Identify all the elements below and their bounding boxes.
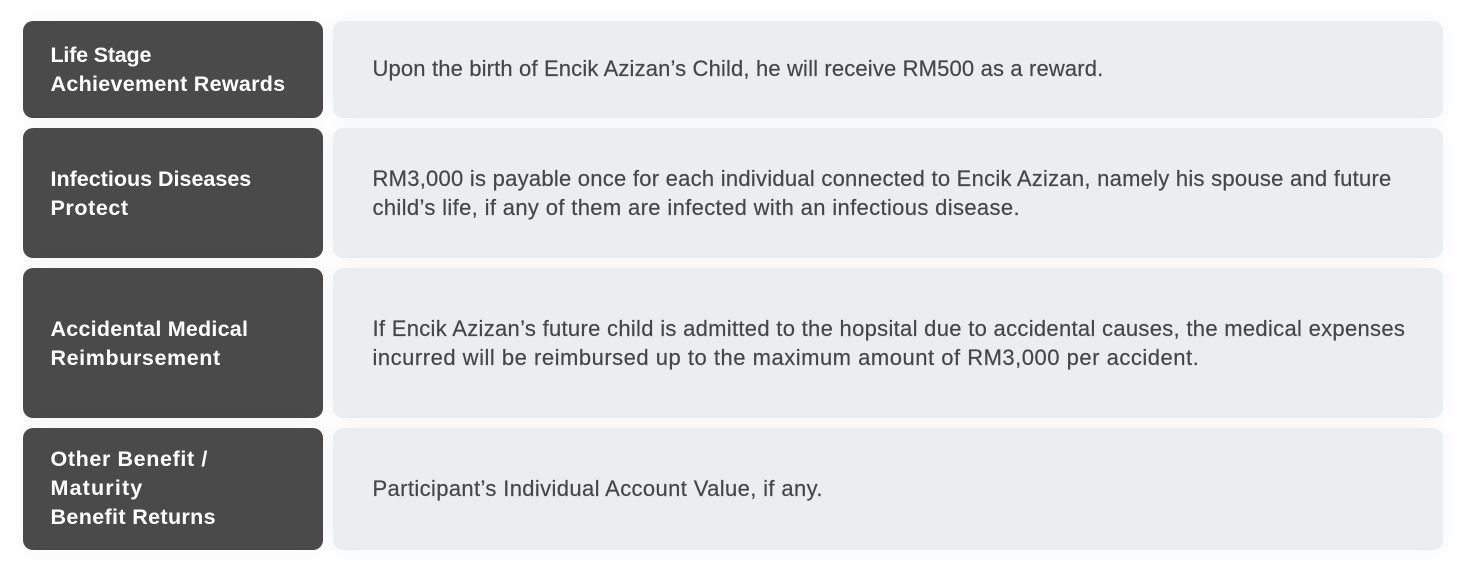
row 2 label: Infectious Diseases Protect (23, 128, 323, 258)
row 1 label: Life Stage Achievement Rewards (23, 21, 323, 118)
row 3 description: incurred will be reimbursed up to the maximum amount of RM3,000 per accident. (372, 345, 1199, 370)
row 2 label: Infectious Diseases Protect: Infectious Diseases (50, 167, 251, 191)
row 3 description (333, 268, 1443, 418)
row 4 label: Other Benefit / Maturity Benefit Returns: Benefit Returns (50, 504, 216, 528)
row 4 label: Other Benefit / Maturity Benefit Returns: Maturity (50, 476, 143, 500)
row 2 description (333, 128, 1443, 258)
row 1 description: Upon the birth of Encik Azizan’s Child, he will receive RM500 as a reward. (372, 56, 1103, 81)
row 3 label: Accidental Medical Reimbursement: Accidental Medical (50, 317, 248, 341)
row 4 label: Other Benefit / Maturity Benefit Returns: Other Benefit / (50, 446, 208, 470)
row 1 label: Life Stage Achievement Rewards: Life Stage (50, 42, 151, 66)
row 3 label: Accidental Medical Reimbursement (23, 268, 323, 418)
row 2 description: child’s life, if any of them are infected with an infectious disease. (372, 195, 1020, 220)
row 3 label: Accidental Medical Reimbursement: Reimbursement (50, 346, 221, 370)
row 4 label: Other Benefit / Maturity Benefit Returns (23, 428, 323, 550)
row 2 description: RM3,000 is payable once for each individual connected to Encik Azizan, namely his spouse and future (372, 166, 1392, 191)
row 4 description (333, 428, 1443, 550)
row 1 description (333, 21, 1443, 118)
row 1 label: Life Stage Achievement Rewards: Achievement Rewards (50, 72, 285, 96)
row 2 label: Infectious Diseases Protect: Protect (50, 196, 129, 220)
row 3 description: If Encik Azizan’s future child is admitted to the hopsital due to accidental causes, the medical expenses (372, 316, 1405, 341)
row 4 description: Participant’s Individual Account Value, if any. (372, 476, 823, 500)
